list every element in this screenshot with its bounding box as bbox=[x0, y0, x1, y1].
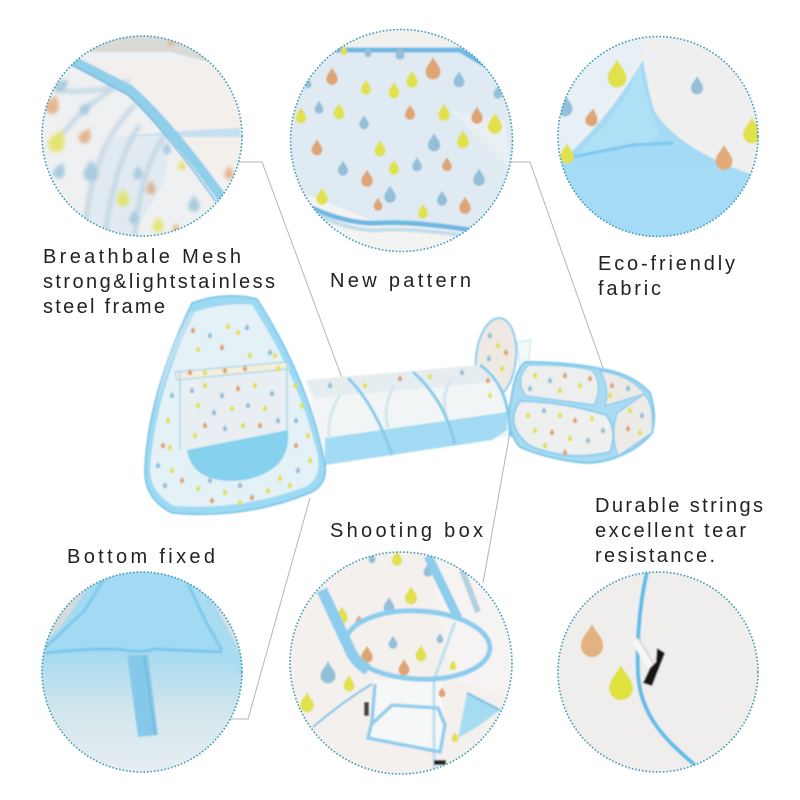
panel: new pattern detail circle bbox=[288, 26, 516, 256]
heading: new pattern caption: New pattern bbox=[330, 270, 471, 292]
heading: eco-friendly fabric caption: Eco-friendly bbox=[598, 253, 735, 275]
heading: breathable mesh caption: Breathbale Mesh bbox=[43, 246, 241, 268]
heading: durable strings caption: resistance. bbox=[595, 545, 715, 567]
panel: breathable mesh detail circle bbox=[40, 34, 244, 240]
panel: durable strings detail circle bbox=[556, 570, 760, 774]
ball pit bbox=[509, 362, 654, 463]
panel: shooting box detail circle bbox=[288, 550, 520, 776]
heading: bottom fixed caption: Bottom fixed bbox=[67, 546, 215, 568]
heading: eco-friendly fabric caption bbox=[598, 253, 735, 300]
heading: breathable mesh caption: steel frame bbox=[43, 296, 165, 318]
heading: breathable mesh caption: strong&lightstainless bbox=[43, 271, 275, 293]
connector: bottom circle to tent bbox=[230, 498, 310, 719]
panel: bottom fixed detail circle bbox=[40, 570, 244, 774]
heading: durable strings caption bbox=[595, 495, 763, 567]
tent bbox=[145, 296, 325, 514]
panel: eco-friendly fabric detail circle bbox=[556, 34, 761, 240]
heading: durable strings caption: Durable strings bbox=[595, 495, 763, 517]
tunnel bbox=[306, 365, 510, 465]
heading: shooting box caption: Shooting box bbox=[330, 520, 483, 542]
heading: eco-friendly fabric caption: fabric bbox=[598, 278, 661, 300]
hoop backboard and basket bbox=[472, 316, 531, 400]
connector: mesh circle to tunnel bbox=[238, 162, 342, 378]
connector: shooting box circle to hoop bbox=[483, 348, 525, 583]
illustration: tent, tunnel, hoop and ball pit bbox=[145, 296, 654, 514]
connector: pattern circle to ball pit bbox=[511, 162, 603, 368]
heading: durable strings caption: excellent tear bbox=[595, 520, 746, 542]
heading: breathable mesh caption bbox=[43, 246, 275, 318]
